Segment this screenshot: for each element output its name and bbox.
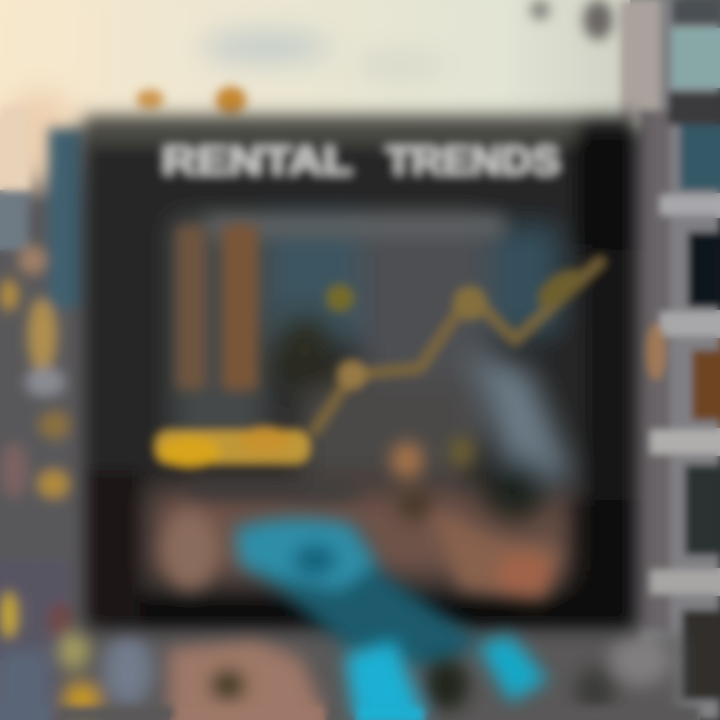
background: bottom foreground and hand — [0, 632, 680, 720]
dark shadow and pale reflection on screen — [279, 316, 575, 522]
orange phone buttons — [136, 86, 247, 114]
subtitle band — [205, 215, 505, 237]
title: rental trends: RENTAL — [162, 139, 352, 183]
bar chart: two brown bars — [176, 225, 258, 390]
line chart: golden trend line — [315, 262, 600, 430]
background: left street with lights — [0, 128, 84, 720]
yellow highlight pill — [155, 427, 310, 467]
background: right apartment building — [530, 0, 720, 720]
background: left street base — [0, 105, 30, 660]
title: rental trends: TRENDS — [386, 139, 560, 183]
small orange markers and brown map shapes — [162, 437, 560, 600]
title: rental trends — [162, 139, 560, 183]
phone screen — [150, 215, 570, 580]
phone frame — [84, 115, 636, 630]
blue pool shape on screen, continuing as diagonal band — [235, 518, 480, 670]
bright blue strips at bottom — [345, 635, 548, 720]
bright blue bottom edge base — [358, 708, 423, 720]
bottom edge base — [0, 706, 700, 720]
